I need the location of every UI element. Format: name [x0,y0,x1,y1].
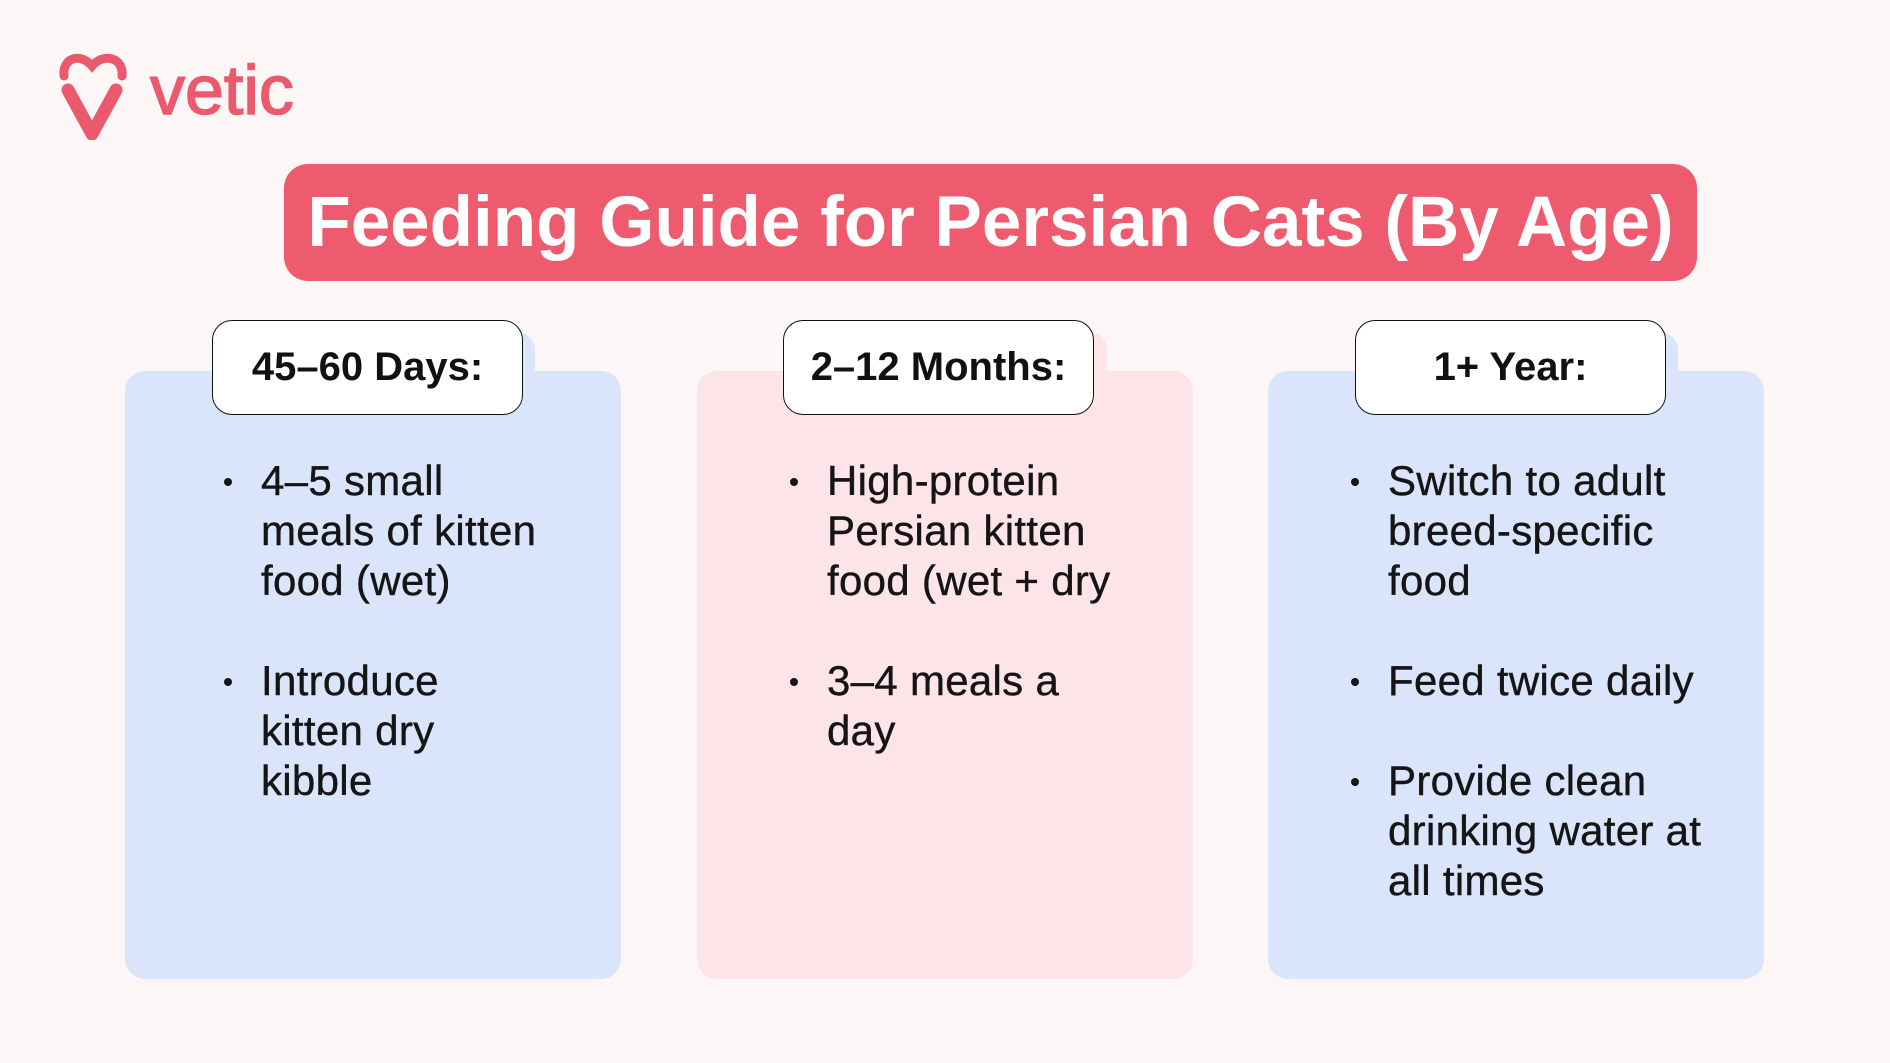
bullet list: kibble [261,757,373,804]
heading tab [212,320,523,415]
panel: 45-60 days [125,320,621,979]
bullet list: food (wet) [261,557,451,604]
icon: heart V [59,54,127,140]
bullet list: 4–5 small [261,457,443,504]
bullet list: kitten dry [261,707,434,754]
heading tab: 1+ Year: [1434,345,1587,389]
heading tab [1355,320,1666,415]
bullet list: all times [1388,857,1545,904]
bullet list [224,457,536,804]
bullet list: Introduce [261,657,439,704]
title: Feeding Guide for Persian Cats (By Age) [307,183,1674,262]
heading tab: 45–60 Days: [252,345,483,389]
bullet list: Feed twice daily [1388,657,1694,704]
heading tab: 2–12 Months: [811,345,1066,389]
panel: 2-12 months [697,320,1193,979]
bullet list: drinking water at [1388,807,1701,854]
bullet list: High-protein [827,457,1059,504]
heading tab [783,320,1094,415]
bullet list: food [1388,557,1471,604]
bullet list: breed-specific [1388,507,1654,554]
bullet list: day [827,707,896,754]
bullet list [1351,457,1701,904]
bullet list: Persian kitten [827,507,1086,554]
brand name: vetic [150,51,294,129]
panel: 1+ year [1268,320,1764,979]
bullet list [790,457,1110,754]
bullet list: Switch to adult [1388,457,1666,504]
logo [59,51,294,140]
bullet list: 3–4 meals a [827,657,1059,704]
bullet list: food (wet + dry [827,557,1110,604]
title [284,164,1697,281]
bullet list: meals of kitten [261,507,536,554]
bullet list: Provide clean [1388,757,1646,804]
